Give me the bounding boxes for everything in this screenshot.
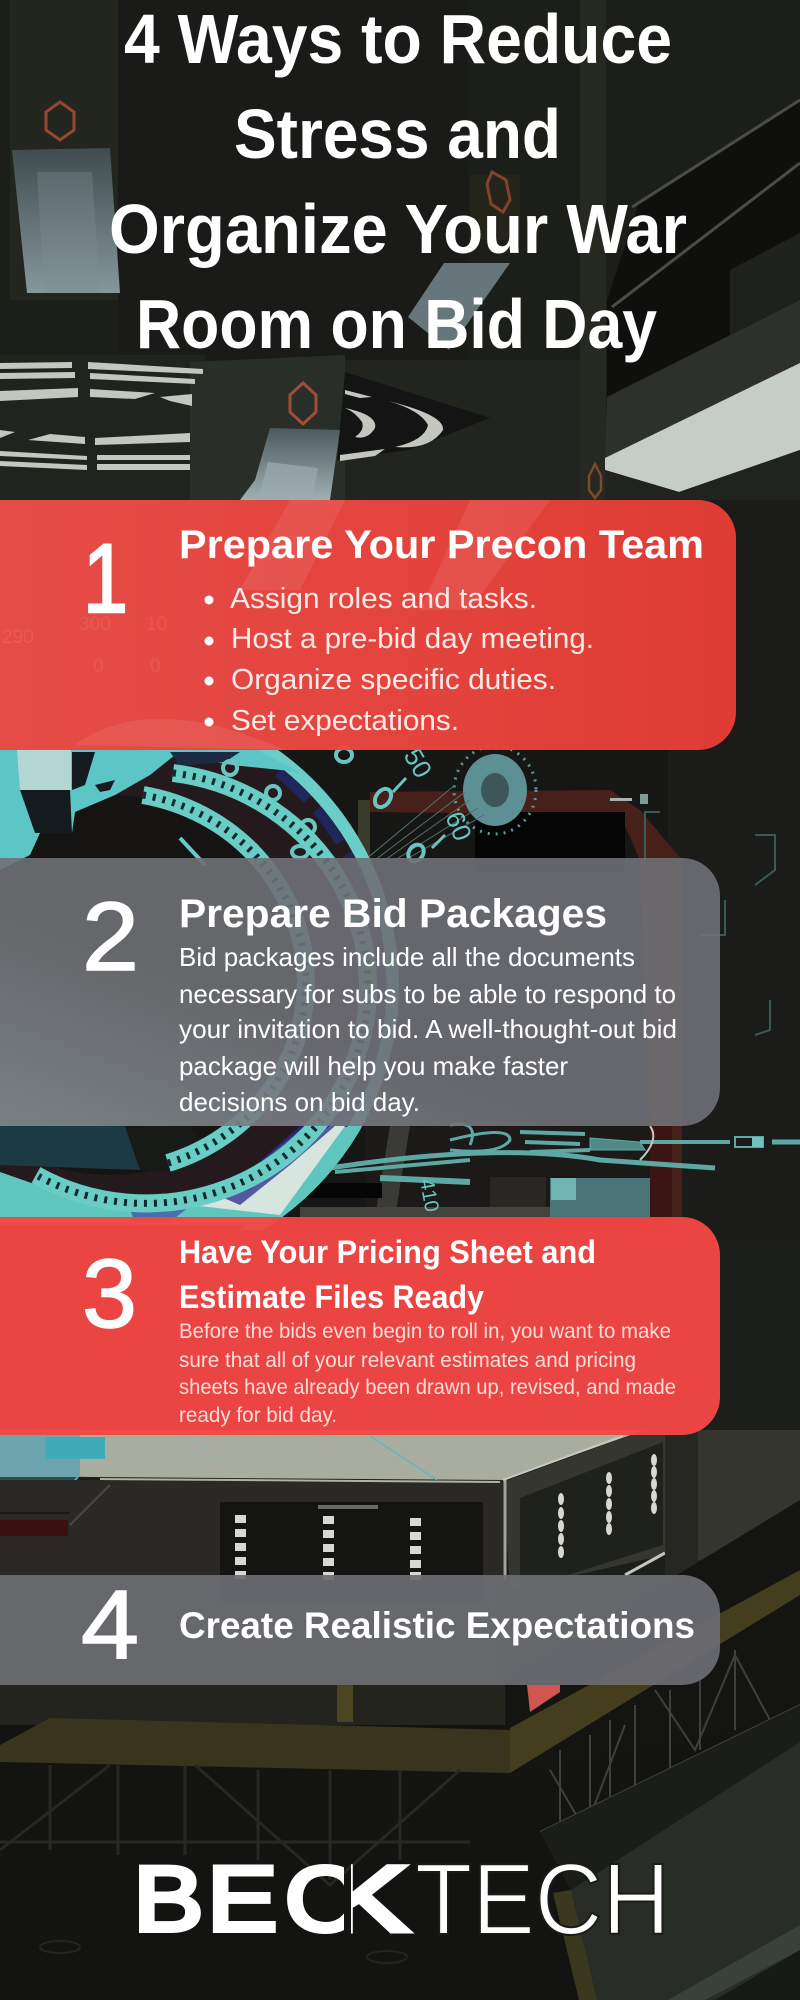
body text 2: necessary for subs to be able to respond to bbox=[179, 979, 676, 1009]
middle band base bbox=[0, 500, 800, 1230]
teal bottom fields bbox=[0, 1126, 362, 1217]
body text 2 bbox=[179, 942, 677, 1117]
heading 1: Prepare Your Precon Team bbox=[179, 523, 704, 567]
chain rings bbox=[36, 773, 368, 1203]
panel 4: create realistic expectations bbox=[0, 1570, 720, 1685]
faint background details seen through panel 1: 0 bbox=[93, 656, 104, 677]
background: control room scene: 50 bbox=[398, 743, 438, 783]
title: 4 Ways to Reduce bbox=[124, 0, 672, 78]
server body bbox=[0, 1480, 503, 1720]
bullet list: Organize specific duties. bbox=[231, 664, 556, 696]
bullet list: Assign roles and tasks. bbox=[230, 583, 537, 615]
panel 1: prepare your precon team bbox=[0, 500, 736, 750]
background: control room scene: 60 bbox=[439, 807, 478, 845]
heading 3: Estimate Files Ready bbox=[179, 1279, 484, 1315]
logo: BeckTech bbox=[139, 1863, 664, 1936]
teal streaks right of dial bbox=[330, 1124, 800, 1182]
panel 2: prepare bid packages bbox=[0, 858, 720, 1126]
body text 3: Before the bids even begin to roll in, you want to make bbox=[179, 1320, 671, 1343]
body text 3: sure that all of your relevant estimates and pricing bbox=[179, 1349, 636, 1372]
heading 3: Have Your Pricing Sheet and bbox=[179, 1234, 596, 1270]
body text 3: sheets have already been drawn up, revised, and made bbox=[179, 1376, 676, 1399]
title: Organize Your War bbox=[109, 190, 687, 268]
body text 2: Bid packages include all the documents bbox=[179, 942, 635, 972]
faint background details seen through panel 1: 300 bbox=[79, 614, 111, 635]
logo: BeckTech: E bbox=[207, 1848, 277, 1950]
logo: BeckTech: K bbox=[328, 1848, 407, 1950]
background: control room scene: 410 bbox=[415, 1177, 443, 1214]
indicator LEDs bbox=[235, 1454, 657, 1580]
logo: BeckTech: TECH bbox=[415, 1844, 670, 1956]
heading 3 bbox=[179, 1234, 596, 1315]
body text 3 bbox=[179, 1320, 676, 1427]
panel 3: pricing sheet and estimate files bbox=[0, 1217, 720, 1435]
ring lights bbox=[0, 355, 601, 500]
body text 2: package will help you make faster bbox=[179, 1051, 568, 1081]
number 3: 3 bbox=[82, 1239, 137, 1348]
heading 4: Create Realistic Expectations bbox=[179, 1605, 695, 1646]
number 1: 1 bbox=[83, 524, 128, 633]
lower structure bbox=[0, 1720, 800, 2000]
faint background details seen through panel 1: 0 bbox=[150, 656, 161, 677]
bullet list bbox=[204, 583, 594, 737]
big cyan dial bbox=[0, 750, 399, 1217]
body text 2: your invitation to bid. A well-thought-out bid bbox=[179, 1014, 677, 1044]
bullet list: Set expectations. bbox=[231, 705, 459, 737]
body text 2: decisions on bid day. bbox=[179, 1087, 420, 1117]
body text 3: ready for bid day. bbox=[179, 1404, 337, 1427]
small dial bbox=[463, 754, 527, 826]
title: Room on Bid Day bbox=[136, 285, 657, 363]
logo: BeckTech: C bbox=[285, 1848, 361, 1950]
right HUD marks bbox=[645, 812, 775, 1035]
number 2: 2 bbox=[82, 882, 139, 991]
logo: BeckTech: B bbox=[133, 1848, 204, 1950]
faint background details seen through panel 1 bbox=[2, 500, 550, 750]
server top bbox=[0, 1430, 645, 1480]
title: Stress and bbox=[234, 95, 561, 173]
title bbox=[109, 0, 687, 363]
faint background details seen through panel 1: 290 bbox=[2, 627, 34, 648]
faint background details seen through panel 1: 10 bbox=[146, 614, 167, 635]
truss lines bbox=[0, 1765, 470, 1885]
bullet list: Host a pre-bid day meeting. bbox=[231, 623, 594, 655]
number 4: 4 bbox=[81, 1570, 139, 1679]
heading 2: Prepare Bid Packages bbox=[179, 892, 607, 936]
red frame behind dial bbox=[370, 790, 682, 1217]
